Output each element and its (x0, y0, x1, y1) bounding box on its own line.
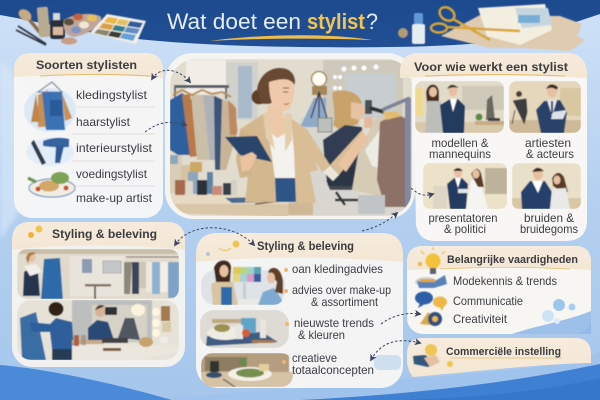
icon: brushes (16, 7, 46, 45)
dividers (72, 107, 155, 186)
panel: belangrijke vaardigheden (407, 246, 591, 334)
panel: soorten stylisten (14, 53, 163, 218)
photo: presentatoren en politici (423, 163, 507, 209)
title (167, 9, 378, 34)
text: oan kledingadvies: oan kledingadvies (292, 262, 383, 276)
icon: measuring tape (420, 312, 442, 326)
title: ? (366, 9, 378, 34)
photo: bruiden en bruidegoms (512, 163, 581, 209)
label: bruiden: bruiden & (524, 211, 574, 225)
icon: hairdryer (26, 138, 74, 166)
icon: scissors (431, 4, 520, 40)
bullets (282, 268, 289, 364)
arrow: from haarstylist (145, 122, 186, 132)
woman (426, 84, 439, 105)
heading band: voor wie (400, 53, 587, 78)
main stylist woman (225, 68, 369, 203)
heading: commerciele instelling: Commerciële instelling (446, 346, 561, 358)
heading band: soorten stylisten (14, 53, 163, 78)
heading: soorten stylisten: Soorten stylisten (36, 58, 137, 72)
icon: round compact (61, 38, 77, 44)
label: artiesten: artiesten (525, 136, 571, 150)
arrow: between styling panels (175, 228, 254, 245)
hair bun (251, 89, 262, 105)
face (269, 79, 294, 111)
text: en kleuren: & kleuren (298, 328, 345, 342)
tablet (225, 136, 272, 162)
text: nieuwste trends: nieuwste trends (294, 316, 374, 330)
clothes rack (170, 85, 238, 170)
icon: foundation bottle (37, 7, 65, 39)
icon: eyeshadow palette oval (63, 14, 101, 37)
panel: commerciele instelling (407, 338, 591, 377)
icon: colour palette card (90, 14, 146, 44)
photo: colour advice (201, 260, 285, 305)
seated woman with camera (323, 90, 384, 205)
heading: voor wie werkt een stylist: Voor wie werkt een stylist (414, 60, 568, 74)
panel: styling en beleving, middle (196, 233, 403, 388)
left arm (236, 130, 249, 178)
title underline swoosh (210, 35, 372, 41)
icon: bottle (398, 13, 425, 44)
icon: handshake with coin (413, 344, 453, 367)
label: modellen en mannequins: modellen & (432, 136, 488, 150)
header band (0, 0, 600, 47)
label: en politici: & politici (444, 222, 486, 236)
text: advies over make-up: advies over make-up (292, 283, 391, 297)
icon: faint box (374, 355, 401, 370)
photo: plated food (201, 353, 293, 387)
panel: voor wie werkt een stylist (400, 53, 587, 241)
text: creatieve: creatieve (292, 351, 337, 365)
text: haarstylist: haarstylist (76, 115, 131, 129)
man (440, 99, 465, 133)
icon group: make-up tools (16, 7, 146, 45)
room backdrop (170, 59, 412, 216)
text: kledingstylist: kledingstylist (76, 88, 148, 102)
heading: styling en beleving: Styling & beleving (257, 241, 354, 253)
icon group: scissors, fabric and bottle (398, 4, 585, 51)
text: creativiteit: Creativiteit (453, 312, 508, 326)
blazer (240, 114, 276, 202)
table and cosmetics (165, 155, 313, 217)
icon: jacket on hanger (24, 82, 76, 132)
photo: artiesten en acteurs (509, 81, 581, 133)
text: modekennis en trends: Modekennis & trends (453, 274, 557, 288)
panel: hero photo of stylist at work (165, 53, 415, 219)
extended arm (308, 130, 364, 176)
presenter (536, 100, 567, 133)
label: mannequins: mannequins (429, 147, 491, 161)
photo: trends stack (200, 310, 289, 348)
heading band (407, 246, 591, 270)
camera operator (512, 99, 527, 124)
heading: styling en beleving: Styling & beleving (52, 227, 157, 241)
icon: chat bubbles (415, 292, 447, 311)
icon: folded fabric (441, 4, 585, 51)
photo: modellen en mannequins (415, 81, 504, 133)
label: bruidegoms: bruidegoms (520, 222, 578, 236)
label: en acteurs: & acteurs (526, 147, 574, 161)
photo: stylist and photographer (17, 300, 179, 360)
arrow: to hero photo (152, 70, 190, 82)
arrow: concepts to commercieel (371, 341, 420, 360)
decoration: blue wave with bubbles (512, 299, 591, 334)
panel: styling en beleving, left (12, 222, 185, 367)
text: en assortiment: & assortiment (311, 295, 379, 309)
arrow: middle panel to hero photo (362, 213, 397, 231)
title: Wat doet een (167, 9, 301, 34)
arrow: to creativiteit (381, 313, 420, 324)
heading band (12, 222, 185, 250)
icon: light bulb (418, 247, 445, 274)
heading band (196, 233, 403, 262)
text: make-up artist: make-up artist (76, 191, 153, 205)
icon: folded tools (415, 275, 447, 288)
neck (266, 104, 286, 138)
text: communicatie: Communicatie (453, 294, 523, 308)
text: totaalconcepten: totaalconcepten (292, 363, 374, 377)
heading: belangrijke vaardigheden: Belangrijke vaardigheden (447, 254, 578, 266)
title: stylist (307, 9, 366, 34)
text: interieurstylist: interieurstylist (76, 141, 153, 155)
right clothes rail (352, 98, 411, 214)
arrow: hero to voor wie (411, 188, 433, 195)
icon: food plate (28, 172, 75, 197)
label: presentatoren: presentatoren (428, 211, 498, 225)
icon: yellow swirl (206, 240, 240, 256)
studio lights and tripod (300, 64, 378, 132)
icon: yellow dots (28, 226, 42, 238)
photo: atelier with rack (17, 249, 179, 299)
text: voedingstylist: voedingstylist (76, 167, 148, 181)
